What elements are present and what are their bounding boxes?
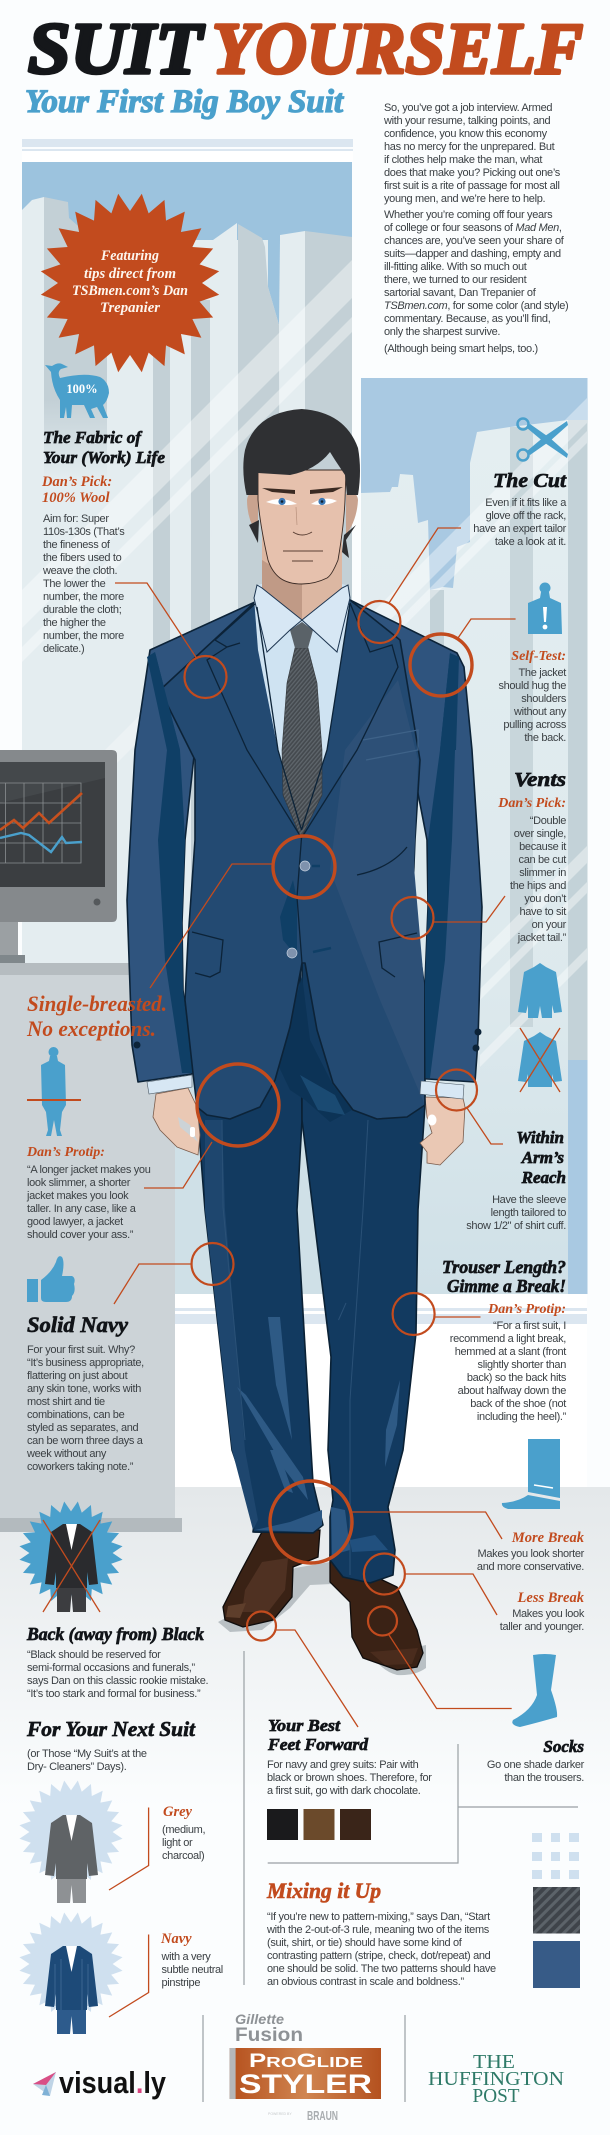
- jacket lighter panel and centre shade: [147, 652, 459, 1103]
- panel text: trouser length: including the heel).”: [477, 1411, 567, 1423]
- panel text: solid navy: any skin tone, works with: [27, 1383, 141, 1395]
- heading: single-breasted: Single-breasted.: [27, 991, 167, 1016]
- logo: the huffington post: THE: [473, 2052, 515, 2073]
- panel text: grey: Grey: [163, 1804, 193, 1820]
- panel text: mixing it up: Mixing it Up: [266, 1878, 381, 1903]
- panel text: vents: Dan’s Pick:: [497, 796, 566, 811]
- panel text: trouser length: Gimme a Break!: [447, 1276, 566, 1296]
- intro text: with your resume, talking points, and: [383, 115, 551, 127]
- panel text: self-test: should hug the: [498, 680, 566, 692]
- panel text: back away from black: says Dan on this classic rookie mistake.: [27, 1675, 208, 1687]
- icon: grey suit: [19, 1780, 123, 1903]
- panel text: mixing it up: [266, 1878, 496, 1988]
- panel text: protip jacket length: should cover your ass.”: [27, 1229, 134, 1241]
- panel text: trouser length: Dan’s Protip:: [487, 1302, 566, 1317]
- panel text: the cut: take a look at it.: [495, 536, 566, 548]
- panel text: protip jacket length: good lawyer, a jacket: [27, 1216, 123, 1228]
- intro text: young men, and we’re here to help.: [384, 193, 545, 205]
- panel text: grey: (medium,: [162, 1824, 205, 1836]
- panel text: within arm's reach: Reach: [521, 1168, 566, 1187]
- heading: for your next suit: [26, 1717, 196, 1773]
- panel text: fabric of your work life: the fineness of: [43, 539, 111, 551]
- panel text: solid navy: combinations, can be: [27, 1409, 125, 1421]
- panel text: back away from black: semi-formal occasions and funerals,”: [27, 1662, 196, 1674]
- panel text: solid navy: [26, 1312, 144, 1473]
- icon: jacket single vent crossed out: [518, 1028, 562, 1092]
- panel text: more break: [477, 1530, 585, 1573]
- panel text: vents: you don’t: [524, 893, 566, 905]
- panel text: mixing it up: one should be solid. The two patterns should have: [267, 1963, 496, 1975]
- shirt: [254, 575, 350, 830]
- panel text: protip jacket length: look slimmer, a shorter: [27, 1177, 131, 1189]
- panel text: vents: can be cut: [519, 854, 566, 866]
- icon: sheep 100%: 100%: [66, 382, 98, 396]
- panel text: your best feet forward: For navy and grey suits: Pair with: [267, 1759, 418, 1771]
- panel text: fabric of your work life: The Fabric of: [43, 428, 143, 447]
- panel text: back away from black: “It’s too stark and formal for business.”: [27, 1688, 201, 1700]
- intro text: confidence, you know this economy: [384, 128, 548, 140]
- intro text: only the sharpest survive.: [384, 326, 500, 338]
- buttons: [287, 861, 310, 958]
- icon: navy pinstripe suit: [19, 1912, 123, 2034]
- neck: [262, 533, 342, 620]
- hands: [153, 1088, 465, 1165]
- panel text: fabric of your work life: Dan’s Pick:: [41, 474, 112, 490]
- panel text: your best feet forward: Your Best: [268, 1716, 341, 1735]
- panel text: vents: jacket tail.”: [517, 932, 567, 944]
- panel text: fabric of your work life: [41, 428, 165, 655]
- panel text: fabric of your work life: The lower the: [43, 578, 106, 590]
- panel text: grey: charcoal): [162, 1850, 204, 1862]
- panel text: fabric of your work life: Your (Work) Life: [43, 448, 165, 467]
- panel text: navy: pinstripe: [162, 1977, 200, 1989]
- heading: for your next suit: For Your Next Suit: [26, 1717, 196, 1741]
- icon: thumbs up: [27, 1256, 75, 1302]
- panel text: fabric of your work life: Aim for: Super: [43, 513, 109, 525]
- panel text: protip jacket length: Dan’s Protip:: [26, 1145, 105, 1160]
- panel text: more break: More Break: [511, 1530, 585, 1546]
- subtitle: Your First Big Boy Suit: [25, 84, 344, 120]
- panel text: trouser length: hemmed at a slant (front: [455, 1346, 566, 1358]
- panel text: the cut: have an expert tailor: [473, 523, 567, 535]
- panel text: fabric of your work life: weave the cloth.: [42, 565, 117, 577]
- starburst badge: Featuring: [100, 248, 159, 264]
- logo: gillette fusion proglide styler: STYLER: [239, 2069, 372, 2099]
- panel text: back away from black: Back (away from) Black: [26, 1624, 204, 1644]
- intro text: commentary. Because, as you’ll find,: [384, 313, 551, 325]
- panel text: socks: [487, 1737, 585, 1784]
- panel text: fabric of your work life: durable the cloth;: [43, 604, 122, 616]
- logo: the huffington post: [428, 2052, 564, 2107]
- logo: gillette fusion proglide styler: Gillette: [235, 2011, 284, 2027]
- pattern swatches: [532, 1833, 580, 1988]
- panel text: less break: Makes you look: [512, 1608, 585, 1620]
- shoe colour swatches: [267, 1809, 371, 1840]
- panel text: back away from black: [26, 1624, 208, 1700]
- logo: gillette fusion proglide styler: Fusion: [235, 2025, 303, 2046]
- panel text: vents: on your: [532, 919, 567, 931]
- intro text: suits—dapper and dashing, empty and: [384, 248, 561, 260]
- logo: the huffington post: POST: [472, 2086, 520, 2107]
- panel text: fabric of your work life: 110s-130s (That’s: [43, 526, 125, 538]
- panel text: fabric of your work life: delicate.): [43, 643, 84, 655]
- head: [243, 409, 360, 584]
- logo: braun: BRAUN: [307, 2108, 338, 2123]
- panel text: the cut: The Cut: [493, 470, 568, 492]
- trousers: [197, 960, 425, 1583]
- panel text: vents: over single,: [514, 828, 566, 840]
- cuffs: [147, 1075, 464, 1099]
- panel text: mixing it up: with the 2-out-of-3 rule, meaning two of the items: [266, 1924, 490, 1936]
- panel text: within arm's reach: [466, 1128, 566, 1232]
- callout circles and leader lines: [109, 528, 578, 2102]
- panel text: navy: [160, 1931, 223, 1989]
- panel text: vents: slimmer in: [519, 867, 566, 879]
- icon: sheep 100%: [45, 363, 109, 418]
- heading: single-breasted: No exceptions.: [26, 1016, 156, 1041]
- title: YOURSELF: [212, 8, 583, 89]
- panel text: navy: Navy: [160, 1931, 192, 1947]
- panel text: vents: the hips and: [510, 880, 566, 892]
- panel text: vents: [497, 769, 567, 944]
- starburst badge: [41, 194, 219, 372]
- panel text: socks: Go one shade darker: [487, 1759, 585, 1771]
- panel text: mixing it up: contrasting pattern (stripe, check, dot/repeat) and: [267, 1950, 491, 1962]
- panel text: self-test: The jacket: [519, 667, 566, 679]
- illustration: man in navy suit: [127, 409, 482, 1675]
- panel text: your best feet forward: [267, 1716, 432, 1797]
- panel text: mixing it up: (suit, shirt, or tie) should have some kind of: [267, 1937, 463, 1949]
- panel text: navy: subtle neutral: [162, 1964, 223, 1976]
- panel text: mixing it up: an obvious contrast in scale and boldness.”: [267, 1976, 464, 1988]
- panel text: solid navy: most shirt and tie: [27, 1396, 105, 1408]
- panel text: self-test: without any: [513, 706, 567, 718]
- panel text: more break: Makes you look shorter: [478, 1548, 585, 1560]
- panel text: solid navy: can be worn three days a: [27, 1435, 144, 1447]
- icon: jacket double vent: [518, 963, 562, 1018]
- logo: braun: [268, 2108, 338, 2123]
- intro text: ill-fitting alike. With so much out: [384, 261, 527, 273]
- icon: standing man jacket length: [27, 1047, 81, 1136]
- panel text: fabric of your work life: 100% Wool: [42, 490, 110, 506]
- panel text: vents: “Double: [530, 815, 566, 827]
- panel text: trouser length: back of the shoe (not: [470, 1398, 566, 1410]
- logo: gillette fusion proglide styler: [230, 2011, 381, 2099]
- panel text: trouser length: back) so the back hits: [467, 1372, 567, 1384]
- panel text: mixing it up: “If you’re new to pattern-mixing,” says Dan, “Start: [267, 1911, 490, 1923]
- panel: left city skyline: [22, 162, 352, 1002]
- title: [28, 8, 583, 89]
- panel text: vents: have to sit: [519, 906, 566, 918]
- panel text: your best feet forward: a first suit, go with dark chocolate.: [267, 1785, 421, 1797]
- panel text: within arm's reach: Arm’s: [521, 1148, 564, 1167]
- intro text: TSBmen.com, for some color (and style): [384, 300, 568, 312]
- starburst badge: Trepanier: [100, 300, 160, 316]
- jacket body: [160, 600, 425, 1119]
- panel text: protip jacket length: jacket makes you look: [26, 1190, 129, 1202]
- panel text: fabric of your work life: number, the more: [43, 591, 124, 603]
- icon: scissors: [518, 418, 568, 460]
- heading: single-breasted: [26, 991, 167, 1041]
- icon: self-test silhouette: [528, 582, 562, 634]
- panel text: fabric of your work life: number, the more: [43, 630, 124, 642]
- panel text: trouser length: [442, 1257, 567, 1423]
- panel text: fabric of your work life: the fibers used to: [43, 552, 122, 564]
- sleeve shading: [134, 652, 482, 1078]
- heading: for your next suit: (or Those “My Suit’s at the: [27, 1748, 147, 1760]
- intro text: chances are, you’ve seen your share of: [384, 235, 565, 247]
- panel text: self-test: Self-Test:: [511, 649, 566, 664]
- panel text: back away from black: “Black should be reserved for: [27, 1649, 161, 1661]
- jacket sleeves: [127, 600, 482, 1082]
- panel text: trouser length: Trouser Length?: [442, 1257, 566, 1277]
- panel text: solid navy: styled as separates, and: [27, 1422, 139, 1434]
- intro text: sartorial savant, Dan Trepanier of: [384, 287, 537, 299]
- heading: for your next suit: Dry- Cleaners” Days).: [27, 1761, 127, 1773]
- panel text: trouser length: “For a first suit, I: [493, 1320, 566, 1332]
- panel text: less break: taller and younger.: [500, 1621, 584, 1633]
- panel text: the cut: [473, 470, 568, 548]
- logo: the huffington post: HUFFINGTON: [428, 2069, 564, 2090]
- panel text: protip jacket length: “A longer jacket makes you: [27, 1164, 150, 1176]
- panel text: within arm's reach: length tailored to: [491, 1207, 566, 1219]
- logo: braun: POWERED BY: [268, 2112, 292, 2116]
- panel text: self-test: shoulders: [521, 693, 567, 705]
- panel text: less break: [500, 1590, 585, 1633]
- starburst badge: tips direct from: [84, 266, 176, 282]
- panel text: your best feet forward: black or brown shoes. Therefore, for: [267, 1772, 432, 1784]
- panel text: trouser length: recommend a light break,: [450, 1333, 566, 1345]
- panel text: within arm's reach: Have the sleeve: [492, 1194, 566, 1206]
- panel text: socks: than the trousers.: [504, 1772, 584, 1784]
- panel text: grey: light or: [162, 1837, 193, 1849]
- panel text: vents: because it: [519, 841, 566, 853]
- shoes: [218, 1530, 426, 1675]
- panel text: the cut: glove off the rack,: [486, 510, 566, 522]
- panel text: navy: with a very: [162, 1951, 210, 1963]
- panel text: less break: Less Break: [517, 1590, 585, 1606]
- icon: trouser break boot: [502, 1439, 560, 1509]
- panel text: within arm's reach: Within: [516, 1128, 564, 1147]
- panel text: self-test: [498, 649, 567, 744]
- intro text: Whether you’re coming off four years: [384, 209, 552, 221]
- panel text: protip jacket length: [26, 1145, 151, 1241]
- panel text: your best feet forward: Feet Forward: [267, 1735, 369, 1754]
- icon: sock: [512, 1654, 557, 1727]
- intro text: if clothes help make the man, what: [384, 154, 542, 166]
- panel text: self-test: the back.: [524, 732, 566, 744]
- starburst badge: TSBmen.com’s Dan: [72, 283, 188, 299]
- panel text: solid navy: week without any: [26, 1448, 107, 1460]
- panel text: socks: Socks: [543, 1737, 584, 1756]
- panel text: solid navy: Solid Navy: [27, 1312, 128, 1337]
- intro text: there, we turned to our resident: [384, 274, 527, 286]
- panel text: solid navy: flattering on just about: [27, 1370, 128, 1382]
- intro text: (Although being smart helps, too.): [384, 343, 538, 355]
- panel text: protip jacket length: taller. In any case, like a: [27, 1203, 137, 1215]
- icon: computer monitor with stock chart: [0, 750, 117, 963]
- panel text: grey: [162, 1804, 205, 1862]
- panel text: solid navy: coworkers taking note.”: [27, 1461, 134, 1473]
- panel text: trouser length: about halfway down the: [458, 1385, 566, 1397]
- panel text: trouser length: slightly shorter than: [478, 1359, 566, 1371]
- trouser folds and highlights: [205, 975, 400, 1575]
- intro text: first suit is a rite of passage for most all: [384, 180, 560, 192]
- panel text: self-test: pulling across: [503, 719, 567, 731]
- tie: [282, 622, 322, 838]
- panel text: vents: Vents: [514, 769, 566, 791]
- panel text: the cut: Even if it fits like a: [485, 497, 567, 509]
- logo: visual.ly: visual.ly: [59, 2065, 167, 2100]
- intro text: [383, 102, 568, 355]
- intro text: So, you’ve got a job interview. Armed: [384, 102, 552, 114]
- panel: right city skyline: [361, 378, 588, 1294]
- collar: [254, 585, 350, 652]
- panel text: more break: and more conservative.: [477, 1561, 584, 1573]
- intro text: does that make you? Picking out one’s: [384, 167, 561, 179]
- panel text: solid navy: “It’s business appropriate,: [27, 1357, 144, 1369]
- lapels and pockets: [192, 603, 418, 977]
- panel: desk and grey left column: [0, 963, 182, 1532]
- logo: gillette fusion proglide styler: P RO G LIDE: [249, 2051, 363, 2072]
- panel text: solid navy: For your first suit. Why?: [27, 1344, 135, 1356]
- intro text: of college or four seasons of Mad Men,: [384, 222, 562, 234]
- intro text: has no mercy for the unprepared. But: [384, 141, 555, 153]
- title: SUIT: [28, 8, 205, 89]
- icon: black suit crossed out: [19, 1501, 123, 1612]
- panel text: within arm's reach: show 1/2" of shirt cuff.: [466, 1220, 566, 1232]
- panel text: fabric of your work life: the higher the: [43, 617, 106, 629]
